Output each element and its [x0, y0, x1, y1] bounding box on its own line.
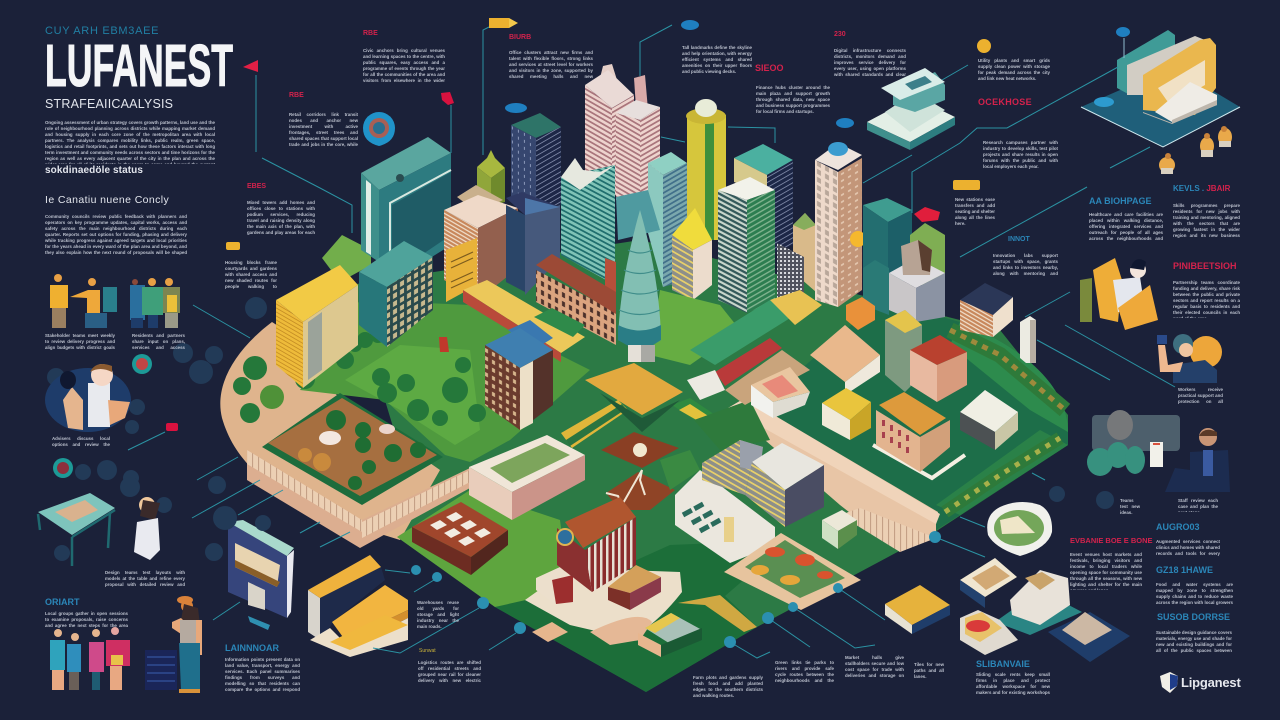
- olive tower and roof: [477, 150, 505, 206]
- heading: SLIBANVAIE: [976, 659, 1030, 669]
- bottom small house: [638, 595, 757, 657]
- yellow hugging figures: [1080, 258, 1158, 330]
- label: EBES: [247, 183, 266, 190]
- heading: LAINNNOAR: [225, 643, 279, 653]
- yellow tags and circle: [226, 39, 991, 250]
- red flag arrow: [243, 60, 258, 72]
- sign panel building: [469, 435, 585, 520]
- blue oval tags: [505, 20, 854, 128]
- garden terrace with stairs: [247, 393, 470, 548]
- yellow billboard: [446, 238, 477, 302]
- subtitle: STRAFEAIICAALYSIS: [45, 97, 173, 111]
- yellow cylinder tower: [686, 99, 726, 240]
- label: BIURB: [509, 34, 531, 41]
- garden trees: [298, 410, 426, 490]
- paragraph: Tiles for new paths and all lanes.: [914, 662, 944, 679]
- paragraph: Warehouses reuse old yards for storage and light industry near the main roads.: [417, 600, 459, 629]
- red marker in lawn: [439, 337, 449, 352]
- paragraph: Farm plots and gardens supply fresh food and add planted edges to the southern districts and walking routes.: [693, 675, 763, 698]
- heading: ORIART: [45, 597, 80, 607]
- paragraph: Research campuses partner with industry to develop skills, test pilot projects and share results in open forums with the public and with local employers each year.: [983, 140, 1058, 169]
- label: OCEKHOSE: [978, 97, 1032, 107]
- connector lines: [128, 25, 1175, 658]
- icon: white dome building: [995, 570, 1082, 635]
- rail yard and market buildings: [687, 290, 922, 405]
- brick row building: [536, 254, 616, 345]
- yellow residential block: [276, 235, 371, 388]
- cone tower: [618, 210, 661, 362]
- brick courtyard building: [412, 502, 508, 575]
- paragraph: Finance hubs cluster around the main plaza and support growth through shared data, new space and business support programmes for local firms and startups.: [756, 85, 830, 114]
- paragraph: New stations ease transfers and add seating and shelter along all the lines here.: [955, 197, 995, 226]
- billboard icon: [228, 520, 294, 630]
- lab team illustration: [1087, 410, 1230, 492]
- tall tan tower with blue roof: [815, 142, 862, 307]
- flower field: [724, 533, 861, 610]
- dark bubble icons: [47, 297, 1114, 561]
- group of five people: [50, 274, 180, 328]
- yellow arrow tag: [489, 18, 518, 28]
- gold layered stack icon: [308, 555, 408, 657]
- icon: oval green frame: [987, 502, 1052, 556]
- white courtyard frame: [873, 445, 965, 478]
- label: RBE: [363, 30, 378, 37]
- yellow low block: [672, 208, 712, 300]
- colourful stall: [751, 367, 810, 418]
- yellow long roof hall: [463, 280, 585, 362]
- table with person: [38, 493, 160, 566]
- green lawn strip behind cone: [650, 290, 740, 365]
- dark brown building: [485, 328, 553, 430]
- statue building: [863, 223, 945, 322]
- teal striped towers: [561, 152, 687, 287]
- label: SIEOO: [755, 63, 784, 73]
- small green cube: [822, 510, 857, 549]
- small teal map markers: [411, 531, 941, 648]
- icon: target badge: [363, 112, 395, 146]
- hedges along right edge: [945, 330, 1065, 512]
- red icon cluster: [914, 207, 940, 222]
- server rack: [145, 650, 177, 690]
- two people bust illustration: [45, 364, 131, 432]
- teal large building: [361, 137, 451, 290]
- crossing roads and central plaza: [561, 363, 770, 450]
- standing woman: [172, 596, 202, 693]
- paragraph: Tall landmarks define the skyline and help orientation, with energy efficient systems and shared amenities on their upper floors and public viewing decks.: [682, 45, 752, 74]
- people group lower left: [50, 627, 130, 690]
- icon: machine on teal base: [867, 68, 955, 150]
- heading: EVBANIE BOE E BONE: [1070, 536, 1153, 545]
- icon: top right vault on platform: [1081, 27, 1240, 147]
- heading: INNOT: [1008, 236, 1030, 243]
- badges: [53, 354, 178, 478]
- yellow cube: [822, 388, 871, 440]
- heading: GZ18 1HAWE: [1156, 565, 1213, 575]
- label: 230: [834, 31, 846, 38]
- section heading: sokdinaedöle status: [45, 165, 143, 176]
- navy building: [511, 113, 561, 205]
- label: RBE: [289, 92, 304, 99]
- ground platform: [220, 240, 1068, 692]
- icons: seated figures: [1159, 126, 1232, 174]
- heading: KEVLS . JBAIR: [1173, 184, 1230, 193]
- icon: rock on blue base: [1048, 612, 1130, 662]
- label: Sunwat: [419, 648, 436, 654]
- logo wordmark: Lipganest: [1181, 675, 1241, 690]
- logo shield: [1160, 672, 1178, 693]
- small tan and checker buildings: [777, 213, 816, 307]
- icon: wooden tile: [960, 558, 1017, 608]
- teal windowed block: [359, 241, 433, 347]
- small brick hall: [608, 565, 661, 610]
- heading: AA BIOHPAGE: [1089, 196, 1152, 206]
- lawn trees: [233, 327, 486, 426]
- green striped tower: [718, 177, 775, 313]
- orange roof apartment: [876, 392, 950, 472]
- white roof warehouse: [960, 390, 1018, 450]
- heading: PINIBEETSIOH: [1173, 261, 1237, 271]
- tan road: [728, 398, 940, 552]
- heading: AUGRO03: [1156, 522, 1200, 532]
- paragraph: Utility plants and smart grids supply clean power with storage for peak demand across the city and link new heat networks.: [978, 58, 1050, 81]
- arm person illustration: [1157, 334, 1222, 383]
- blue grey building: [506, 192, 560, 295]
- navy teal roof building: [734, 144, 793, 255]
- icon: yellow book tile: [885, 585, 950, 634]
- grey and yellow office block: [675, 440, 824, 563]
- brick tan block and white column: [960, 283, 1036, 363]
- brand eyebrow: CUY ARH EBM3AEE: [45, 25, 159, 37]
- teal back tower: [863, 198, 912, 300]
- heading: SUSOB DORRSE: [1157, 612, 1230, 622]
- mid brown building: [444, 185, 518, 300]
- pink towers: [585, 64, 660, 205]
- section heading: Ie Canatiu nuene Concly: [45, 194, 169, 206]
- clock tower hall: [536, 497, 636, 604]
- brown plaza paths: [601, 432, 700, 510]
- red small marks: [441, 92, 454, 105]
- yellow dot marker: [850, 231, 866, 247]
- icon: red dish: [960, 610, 1018, 655]
- red roof block: [910, 335, 967, 402]
